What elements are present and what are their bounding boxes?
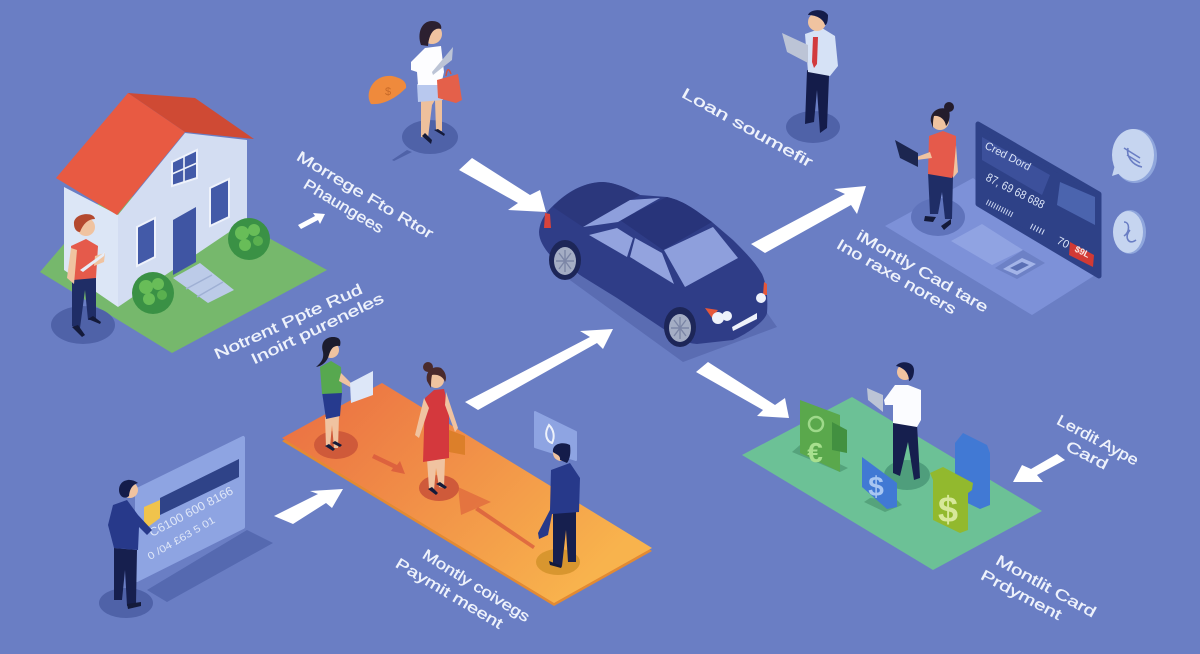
arrow: car to card xyxy=(751,186,866,253)
label: monthly payment: Montly coivegs xyxy=(419,546,533,626)
credit card: 70 xyxy=(1055,235,1071,251)
large card xyxy=(137,438,243,580)
credit card: Cred Dord xyxy=(983,140,1033,173)
icon: small badge xyxy=(1113,210,1146,254)
label: lender type: Lerdit Aype xyxy=(1054,412,1141,469)
credit card: 87, 69 68 688 xyxy=(984,170,1047,212)
rear window xyxy=(583,198,660,227)
icon: lime dollar block: $ xyxy=(938,489,958,530)
car xyxy=(539,182,777,362)
panel: orange payment platform xyxy=(282,337,652,606)
side windows xyxy=(589,228,674,284)
person: man at card xyxy=(99,480,153,618)
label: mortgage: Phaungees xyxy=(300,176,386,237)
panel: credit card with man xyxy=(99,438,273,618)
window left xyxy=(137,218,155,266)
credit card xyxy=(978,124,1099,276)
person: woman in red xyxy=(415,362,465,501)
wheels xyxy=(549,240,696,347)
label: monthly card payment: Montlit Card xyxy=(993,552,1099,621)
panel: credit card platform xyxy=(885,102,1100,315)
label: monthly card: iMontly Cad tare xyxy=(854,227,991,316)
icon: euro block: € xyxy=(807,437,823,468)
small arrow on platform xyxy=(372,454,405,474)
house wall right xyxy=(118,133,247,307)
icon: blue tower xyxy=(955,433,990,509)
arrow: into car from top xyxy=(459,158,546,212)
icon: dollar shield: $ xyxy=(868,471,884,502)
label: monthly card: Ino raxe norers xyxy=(834,236,959,318)
person: woman in green xyxy=(314,337,373,459)
steps xyxy=(173,263,234,303)
door xyxy=(173,207,196,275)
large card: C6100 600 8166 xyxy=(147,483,236,540)
bush front xyxy=(132,272,174,314)
person: man in white shirt xyxy=(867,362,930,490)
icon: lime dollar block xyxy=(930,467,973,533)
credit card: IIIIIIIIIII xyxy=(984,198,1015,219)
wallet icon xyxy=(995,250,1045,279)
house wall left xyxy=(64,187,118,307)
panel: green money platform xyxy=(742,362,1042,570)
icon: water card xyxy=(535,412,576,460)
bush back xyxy=(228,218,270,260)
window right xyxy=(210,179,229,226)
label: notrent: Notrent Ppte Rud xyxy=(212,281,365,363)
label: lender type xyxy=(1054,412,1141,473)
windshield xyxy=(664,227,738,287)
person: woman with tablet xyxy=(895,102,965,236)
arrow: into car from below xyxy=(465,329,613,410)
icon: coin: $ xyxy=(385,86,391,98)
label: monthly payment xyxy=(392,546,533,633)
upper window xyxy=(172,150,197,186)
credit card: $9L xyxy=(1073,244,1092,260)
person: woman at house xyxy=(51,214,115,344)
icon: euro block xyxy=(792,400,848,472)
arrow: car to payments xyxy=(696,362,789,418)
label: monthly card payment xyxy=(978,552,1099,624)
label: monthly card xyxy=(834,227,991,318)
icon: dollar shield xyxy=(862,457,902,512)
person: man with laptop and tie xyxy=(782,10,840,143)
arrow: card to orange platform xyxy=(274,489,343,524)
label: notrent xyxy=(212,281,387,368)
label: monthly payment: Paymit meent xyxy=(392,555,507,633)
credit card: IIIII xyxy=(1028,222,1046,237)
large arrow on platform xyxy=(458,487,535,549)
lights and plate xyxy=(544,213,767,331)
panel: house with lawn xyxy=(40,93,327,353)
label: monthly card payment: Prdyment xyxy=(978,567,1065,624)
arrow: lender to green platform xyxy=(1013,454,1065,482)
roof left face xyxy=(56,93,185,215)
person: man from behind xyxy=(536,443,580,575)
roof right face xyxy=(128,93,254,139)
label: mortgage: Morrege Fto Rtor xyxy=(293,148,436,243)
arrow: small mortgage arrow xyxy=(298,213,325,229)
label: loan: Loan soumefir xyxy=(679,85,815,171)
label: lender type: Card xyxy=(1063,438,1111,473)
large card: 0 /04 £63 5 01 xyxy=(146,515,218,563)
label: mortgage xyxy=(293,148,436,243)
person: woman with tablet and bag xyxy=(369,21,462,161)
icon: speech bubble xyxy=(1112,129,1157,183)
label: notrent: Inoirt pureneles xyxy=(249,290,387,368)
